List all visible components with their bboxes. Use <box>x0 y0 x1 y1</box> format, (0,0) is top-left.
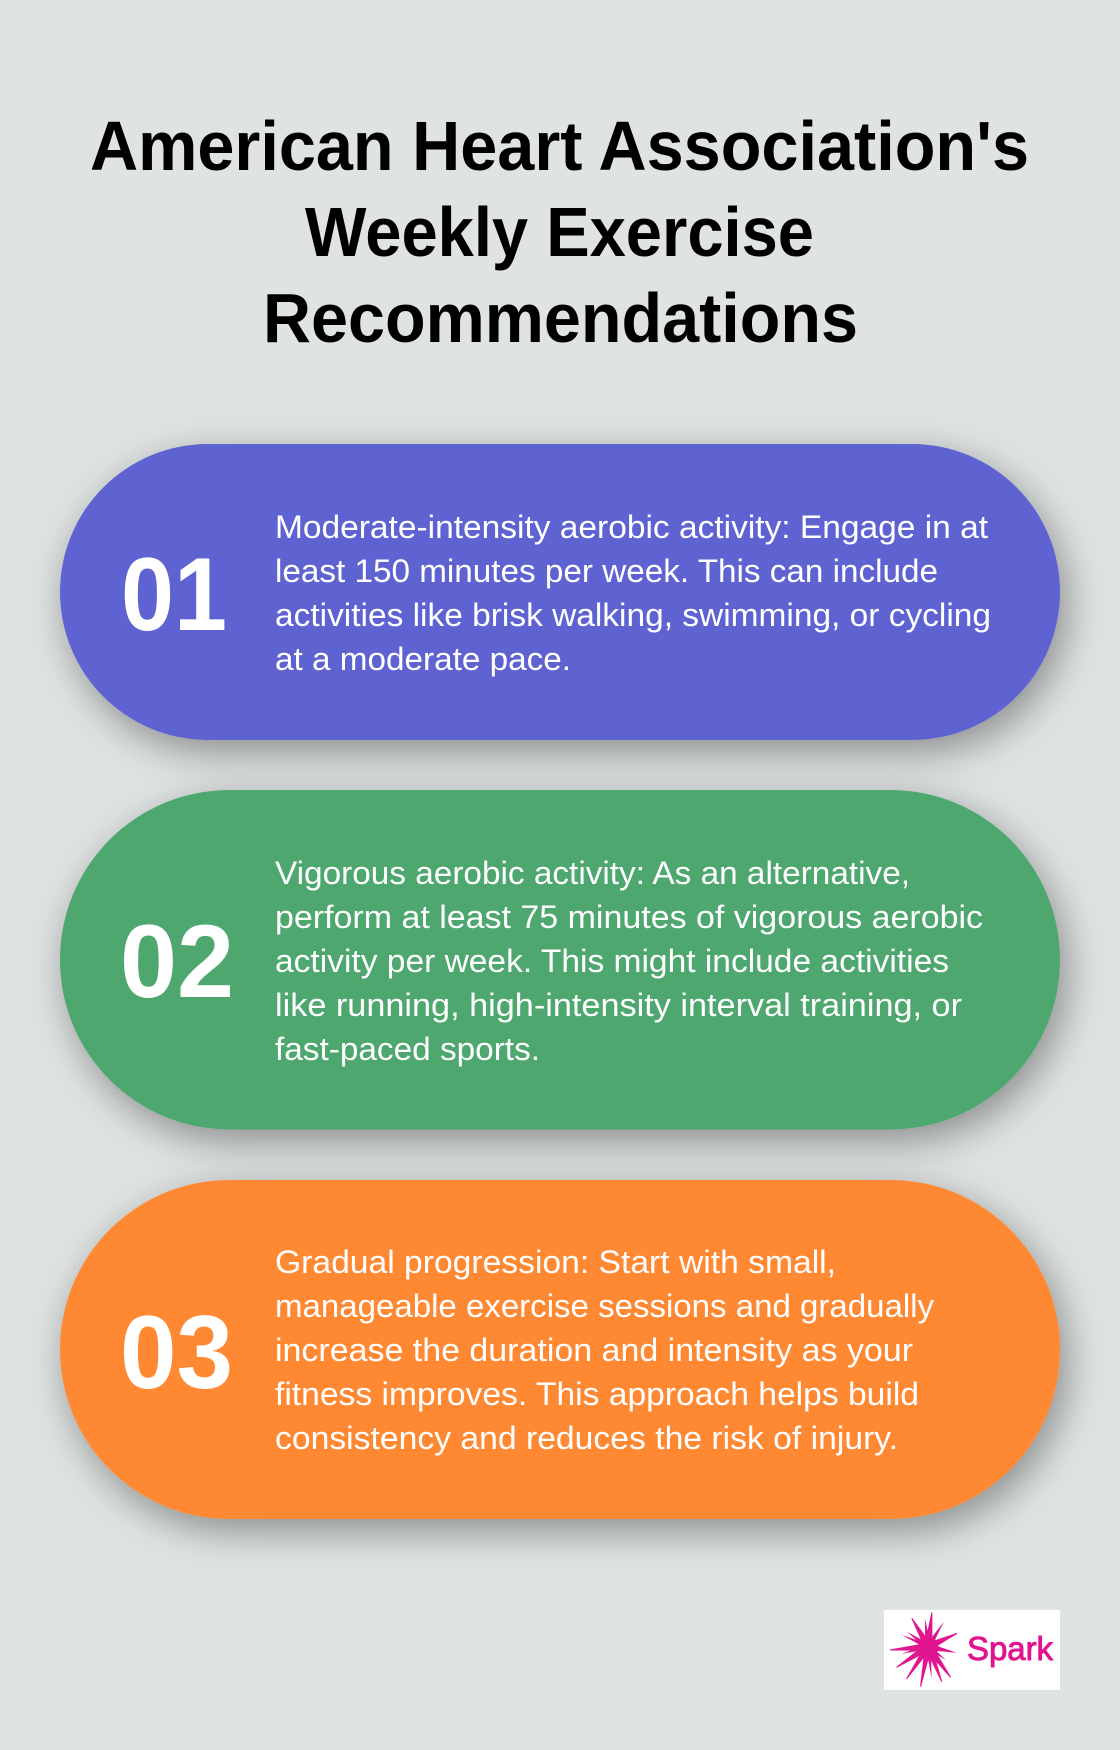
number 02: 02 <box>120 904 234 1020</box>
logo background <box>884 1610 1060 1690</box>
panel: vigorous aerobic activity <box>60 790 1060 1130</box>
pill: purple background <box>60 444 1060 740</box>
title: American Heart Association's <box>90 107 1029 185</box>
title <box>90 107 1029 357</box>
title: Weekly Exercise <box>305 193 814 271</box>
panel: gradual progression <box>60 1180 1060 1519</box>
body text 2: like running, high-intensity interval training, or <box>275 987 962 1023</box>
body text 3 <box>275 1244 934 1456</box>
logo wordmark: Spark <box>967 1630 1053 1667</box>
body text 2: perform at least 75 minutes of vigorous aerobic <box>275 899 983 935</box>
body text 3: consistency and reduces the risk of injury. <box>275 1420 898 1456</box>
body text 2 <box>275 855 983 1067</box>
pill: orange background <box>60 1180 1060 1519</box>
body text 3: increase the duration and intensity as your <box>275 1332 913 1368</box>
number 03: 03 <box>120 1295 233 1411</box>
body text 1: least 150 minutes per week. This can include <box>275 553 938 589</box>
body text 3: Gradual progression: Start with small, <box>275 1244 836 1280</box>
body text 1 <box>275 509 991 677</box>
body text 2: fast-paced sports. <box>275 1031 540 1067</box>
title: Recommendations <box>263 279 858 357</box>
panel: moderate-intensity aerobic activity <box>60 444 1060 740</box>
body text 1: Moderate-intensity aerobic activity: Engage in at <box>275 509 988 545</box>
body text 1: activities like brisk walking, swimming, or cycling <box>275 597 991 633</box>
body text 2: Vigorous aerobic activity: As an alternative, <box>275 855 910 891</box>
pill: green background <box>60 790 1060 1130</box>
icon: starburst <box>890 1612 959 1687</box>
logo: Spark <box>884 1610 1060 1690</box>
body text 3: manageable exercise sessions and gradually <box>275 1288 934 1324</box>
body text 3: fitness improves. This approach helps build <box>275 1376 919 1412</box>
body text 1: at a moderate pace. <box>275 641 571 677</box>
number 01: 01 <box>121 537 227 653</box>
body text 2: activity per week. This might include activities <box>275 943 949 979</box>
